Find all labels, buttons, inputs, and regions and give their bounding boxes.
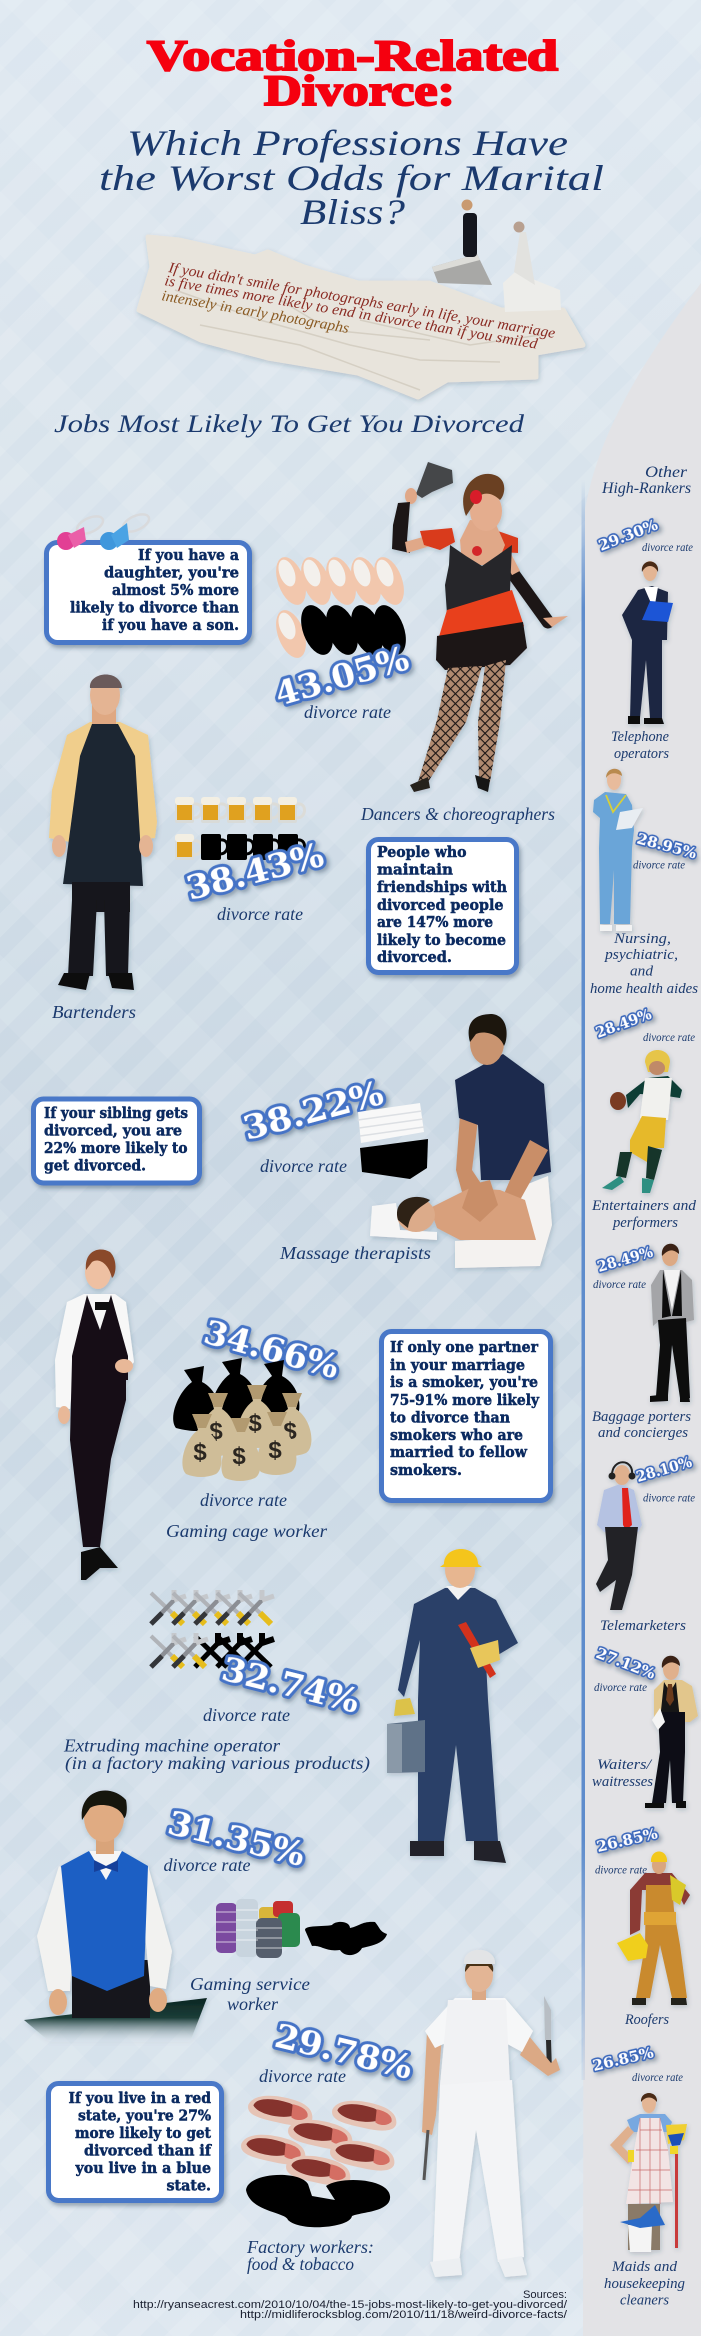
callout: red state fact: If you live in a red: [68, 2090, 211, 2107]
sidebar: waiters: [592, 1644, 698, 1808]
callout: daughter fact: if you have a son.: [102, 617, 239, 634]
label: dancers: Dancers & choreographers: [360, 804, 555, 824]
icon: torn paper with photo fact: is five times more likely to end in divorce than if you smiled: [163, 273, 539, 353]
callout: sibling fact: divorced, you are: [44, 1122, 182, 1140]
icon: torn paper with photo fact: If you didn't smile for photographs early in life, your marriage: [166, 260, 557, 342]
sidebar: telemarketers: Telemarketers: [600, 1618, 686, 1634]
icon row: wrenches: [151, 1590, 274, 1667]
label: divorce rate: divorce rate: [260, 1156, 347, 1176]
sidebar: roofers: 26.85%: [595, 1824, 659, 1856]
callout: red state fact: divorced than if: [84, 2142, 213, 2160]
sources: http://ryanseacrest.com/2010/10/04/the-15-jobs-most-likely-to-get-you-divorced/: [133, 2299, 568, 2311]
label: divorce rate: divorce rate: [164, 1855, 250, 1875]
callout: friendships fact: friendships with: [377, 879, 507, 896]
callout: smoker fact: to divorce than: [390, 1410, 510, 1426]
label: bartenders: Bartenders: [52, 1002, 136, 1022]
label: extruding machine operator: Extruding machine operator: [63, 1736, 281, 1756]
sidebar: maids and housekeeping cleaners: Maids and: [611, 2259, 678, 2275]
subtitle: the Worst Odds for Marital: [99, 158, 604, 198]
sidebar: entertainers: Entertainers and: [591, 1198, 697, 1214]
sidebar: baggage porters: 28.49%: [595, 1243, 655, 1276]
subtitle: Bliss?: [300, 192, 405, 232]
stat: 29.78%: 29.78%: [271, 2016, 416, 2087]
callout: red state fact: more likely to get: [75, 2125, 211, 2142]
sidebar: nursing aides: [590, 769, 699, 997]
icon row: ballet shoes 43.05%: [270, 553, 412, 662]
heading: other high-rankers: [601, 464, 691, 497]
icon: torn paper with photo fact: intensely in early photographs: [160, 288, 350, 337]
callout: daughter fact: almost 5% more: [112, 582, 239, 599]
sidebar: telephone operators: Telephone: [611, 729, 669, 745]
callout: smoker fact: smokers who are: [390, 1427, 523, 1444]
sidebar: waiters: Waiters/: [597, 1757, 653, 1773]
subtitle: [99, 123, 604, 232]
sidebar: maids and housekeeping cleaners: divorce rate: [632, 2070, 684, 2084]
sidebar: nursing aides: home health aides: [590, 981, 698, 997]
sidebar: nursing aides: psychiatric,: [604, 947, 678, 963]
sidebar: maids and housekeeping cleaners: housekeeping: [604, 2276, 685, 2292]
label: factory workers: [246, 2237, 374, 2274]
sidebar: telemarketers: [596, 1453, 696, 1634]
figure: food factory worker: [422, 1950, 560, 2277]
stat: 38.43%: 38.43%: [182, 835, 328, 908]
sidebar: maids and housekeeping cleaners: cleaners: [620, 2292, 669, 2308]
callout: smoker fact: [382, 1332, 550, 1500]
heading: jobs most likely: Jobs Most Likely To Get You Divorced: [54, 411, 525, 438]
callout: smoker fact: is a smoker, you're: [390, 1374, 538, 1391]
label: divorce rate: divorce rate: [304, 702, 391, 722]
callout: friendships fact: maintain: [377, 862, 453, 878]
callout: sibling fact: 22% more likely to: [44, 1140, 188, 1157]
figure: dancer: [392, 462, 568, 792]
callout: daughter fact: likely to divorce than: [70, 600, 239, 616]
callout: daughter fact: If you have a: [138, 547, 240, 564]
icon: broken wedding cake topper: [432, 200, 561, 312]
sidebar: waiters: divorce rate: [594, 1680, 648, 1694]
sidebar: telemarketers: 28.10%: [634, 1453, 694, 1486]
callout: red state fact: [48, 2084, 222, 2200]
callout: friendships fact: divorced.: [377, 949, 452, 966]
callout: daughter fact: daughter, you're: [104, 564, 239, 582]
stat: 43.05%: 43.05%: [270, 638, 413, 714]
sidebar: roofers: [595, 1824, 690, 2028]
label: factory workers: Factory workers:: [246, 2237, 374, 2257]
callout: friendships fact: divorced people: [377, 897, 504, 914]
figure: massage therapist: [370, 1014, 552, 1268]
label: gaming cage worker: Gaming cage worker: [166, 1521, 328, 1541]
sidebar: nursing aides: Nursing,: [613, 931, 671, 947]
sidebar: telephone operators: divorce rate: [642, 540, 694, 554]
sidebar: waiters: 27.12%: [594, 1644, 658, 1683]
sidebar: telephone operators: 29.30%: [596, 516, 660, 555]
stat: 38.22%: 38.22%: [239, 1073, 387, 1148]
icon row: beer mugs 38.43%: [175, 797, 304, 860]
callout: smoker fact: married to fellow: [390, 1444, 527, 1461]
panel: other high-rankers background: [582, 283, 701, 2336]
label: divorce rate: divorce rate: [200, 1490, 287, 1510]
title: [147, 33, 558, 115]
sidebar: telephone operators: [596, 516, 694, 762]
sidebar: maids and housekeeping cleaners: [591, 2043, 687, 2308]
sidebar: telephone operators: operators: [614, 746, 669, 762]
sidebar: entertainers: performers: [612, 1215, 678, 1231]
label: extruding machine operator: (in a factory making various products): [65, 1753, 370, 1774]
icon: towels: [358, 1103, 428, 1179]
sidebar: entertainers: [591, 1005, 697, 1231]
label: factory workers: food & tobacco: [247, 2254, 354, 2274]
icon: torn paper with photo fact: [139, 237, 583, 397]
callout: friendships fact: are 147% more: [377, 914, 493, 931]
sources: Sources:: [523, 2289, 567, 2301]
label: massage therapists: Massage therapists: [279, 1243, 431, 1263]
icon: pacifiers: [57, 511, 152, 550]
sidebar: entertainers: 28.49%: [593, 1005, 654, 1042]
callout: friendships fact: [368, 840, 516, 972]
sources: http://midliferocksblog.com/2010/11/18/weird-divorce-facts/: [240, 2309, 568, 2321]
callout: smoker fact: in your marriage: [390, 1357, 525, 1374]
callout: smoker fact: smokers.: [390, 1462, 462, 1479]
figure: gaming service worker: [24, 1790, 207, 2042]
callout: red state fact: state.: [166, 2178, 211, 2194]
figure: machine operator: [387, 1549, 518, 1863]
callout: sibling fact: get divorced.: [44, 1158, 146, 1174]
icon: casino chips: [216, 1899, 387, 1958]
sidebar: waiters: waitresses: [592, 1774, 653, 1790]
sidebar: roofers: divorce rate: [595, 1862, 648, 1876]
sidebar: baggage porters: [592, 1243, 694, 1441]
label: divorce rate: divorce rate: [217, 904, 303, 924]
label: gaming service worker: worker: [227, 1994, 279, 2014]
sidebar: baggage porters: Baggage porters: [592, 1409, 691, 1425]
callout: smoker fact: If only one partner: [390, 1339, 538, 1356]
label: divorce rate: divorce rate: [259, 2066, 346, 2086]
stat: 32.74%: 32.74%: [218, 1649, 363, 1721]
callout: friendships fact: likely to become: [377, 932, 506, 949]
figure: waitress: [55, 1249, 134, 1580]
callout: smoker fact: 75-91% more likely: [390, 1392, 540, 1409]
subtitle: Which Professions Have: [127, 123, 568, 163]
sidebar: roofers: Roofers: [624, 2012, 669, 2028]
callout: sibling fact: If your sibling gets: [44, 1105, 188, 1122]
callout: red state fact: you live in a blue: [75, 2160, 211, 2177]
label: divorce rate: divorce rate: [203, 1705, 290, 1725]
sources: [133, 2289, 568, 2321]
callout: sibling fact: [34, 1099, 200, 1183]
label: gaming service worker: [190, 1974, 310, 2014]
sidebar: baggage porters: divorce rate: [593, 1277, 647, 1291]
sidebar: maids and housekeeping cleaners: 26.85%: [591, 2043, 655, 2075]
label: extruding machine operator: [63, 1736, 370, 1774]
icon: steaks: [240, 2093, 398, 2227]
stat: 31.35%: 31.35%: [164, 1803, 309, 1874]
heading: other high-rankers: Other: [645, 464, 688, 481]
callout: red state fact: state, you're 27%: [78, 2108, 211, 2124]
sidebar: baggage porters: and concierges: [598, 1425, 688, 1441]
callout: daughter fact: [46, 542, 250, 642]
sidebar: telemarketers: divorce rate: [643, 1490, 696, 1504]
sidebar: nursing aides: divorce rate: [633, 858, 686, 872]
icon: money bags: [173, 1358, 311, 1481]
title: Divorce:: [264, 68, 455, 115]
sidebar: entertainers: divorce rate: [643, 1030, 696, 1044]
heading: other high-rankers: High-Rankers: [601, 480, 691, 497]
title: Vocation-Related: [147, 33, 558, 80]
stat: 34.66%: 34.66%: [200, 1312, 343, 1386]
label: gaming service worker: Gaming service: [190, 1974, 310, 1994]
sidebar: nursing aides: and: [630, 964, 654, 980]
sidebar: nursing aides: 28.95%: [635, 829, 699, 863]
figure: bartender: [49, 674, 157, 990]
callout: friendships fact: People who: [377, 844, 467, 861]
